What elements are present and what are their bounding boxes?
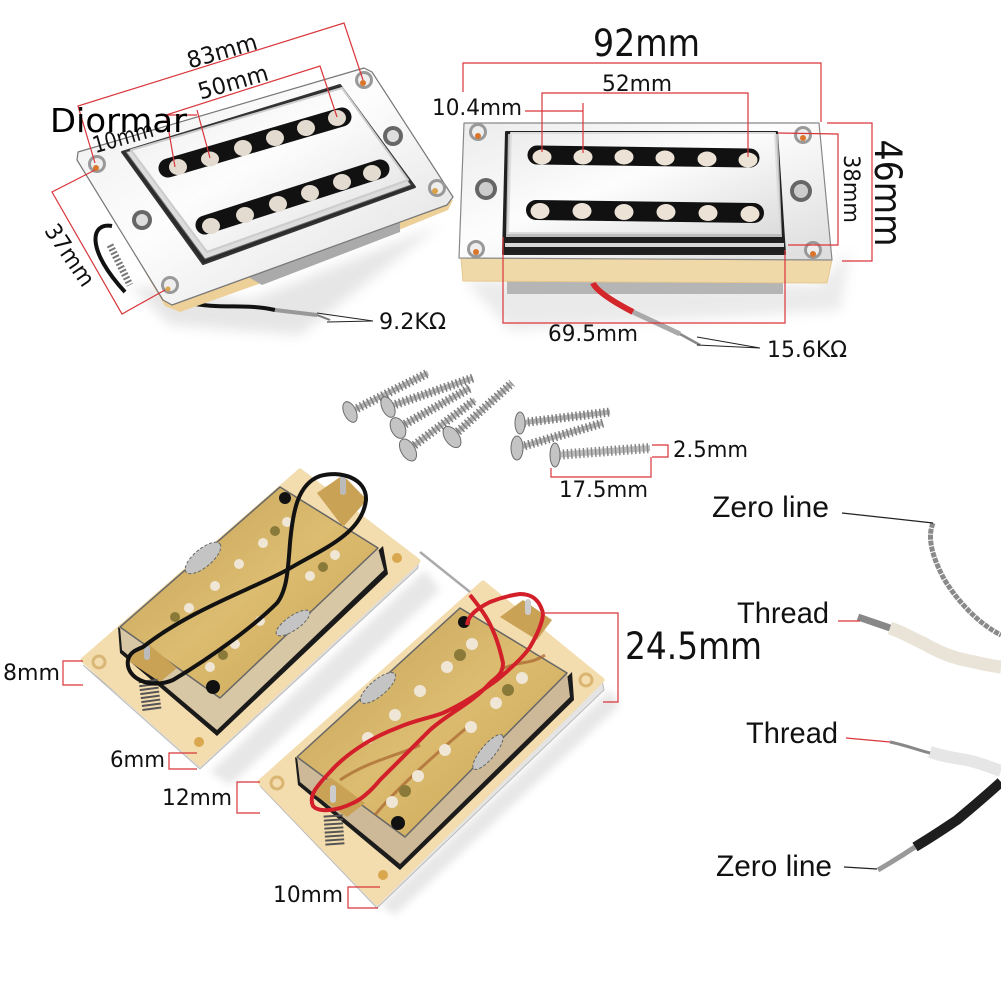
pickup photo: chrome pickup, angled view [77,68,453,335]
black wire figure-eight [128,474,366,684]
solder joints [356,668,508,773]
label: 37mm: 37mm [39,219,100,292]
screws group: left five [340,373,512,464]
wire: white thread upper [858,617,1001,667]
label: thread upper: Thread [737,597,829,630]
label: 17.5mm: 17.5mm [559,478,648,503]
label: 24.5mm: 24.5mm [625,625,762,668]
label: 52mm: 52mm [602,72,672,97]
label: 12mm: 12mm [162,786,232,811]
resistance leader lines [317,313,760,348]
label: thread lower: Thread [746,717,838,750]
label: 83mm: 83mm [184,30,260,74]
spring [148,680,152,710]
label: 8mm: 8mm [3,661,60,686]
label: 10mm rear: 10mm [273,883,343,908]
label: 69.5mm: 69.5mm [548,322,638,347]
label: 10mm: 10mm [90,117,157,159]
spring [333,815,335,845]
solder joints [180,537,313,640]
wire: braided zero line [930,523,1001,635]
wire leader lines [838,513,933,869]
dimension lines: front pickup [463,63,872,323]
label: 46mm: 46mm [866,140,909,246]
wire: black zero line [878,782,1001,870]
pickup black lead coil [95,226,130,292]
red wire figure-eight [312,594,543,810]
pickup red lead wire [593,283,700,345]
dimension lines: angled pickup [52,23,363,314]
label: 2.5mm: 2.5mm [673,438,748,463]
silver wire [420,552,470,592]
wire: white thread lower [890,742,1001,771]
label: 38mm: 38mm [838,155,863,223]
rust streaks [340,655,545,815]
pickup photo: chrome pickup, front view [459,123,850,345]
pickup photo: rear view with black wires [83,471,440,785]
pickup photo: rear view with red wires [260,552,620,915]
label: 50mm: 50mm [195,61,271,105]
label: 6mm: 6mm [110,748,165,773]
label: zero line upper: Zero line [712,491,829,524]
label: zero line lower: Zero line [716,850,832,883]
screws group: right three [511,412,650,467]
brand name: Diormar [50,102,188,140]
dimension lines: screws and rear pickups [63,445,668,908]
label: 92mm: 92mm [593,22,700,65]
label: 10.4mm: 10.4mm [432,96,522,121]
label: 9.2 kilo-ohm: 9.2KΩ [379,310,446,335]
label: 15.6 kilo-ohm: 15.6KΩ [767,338,847,363]
pickup black lead wire [185,302,330,320]
